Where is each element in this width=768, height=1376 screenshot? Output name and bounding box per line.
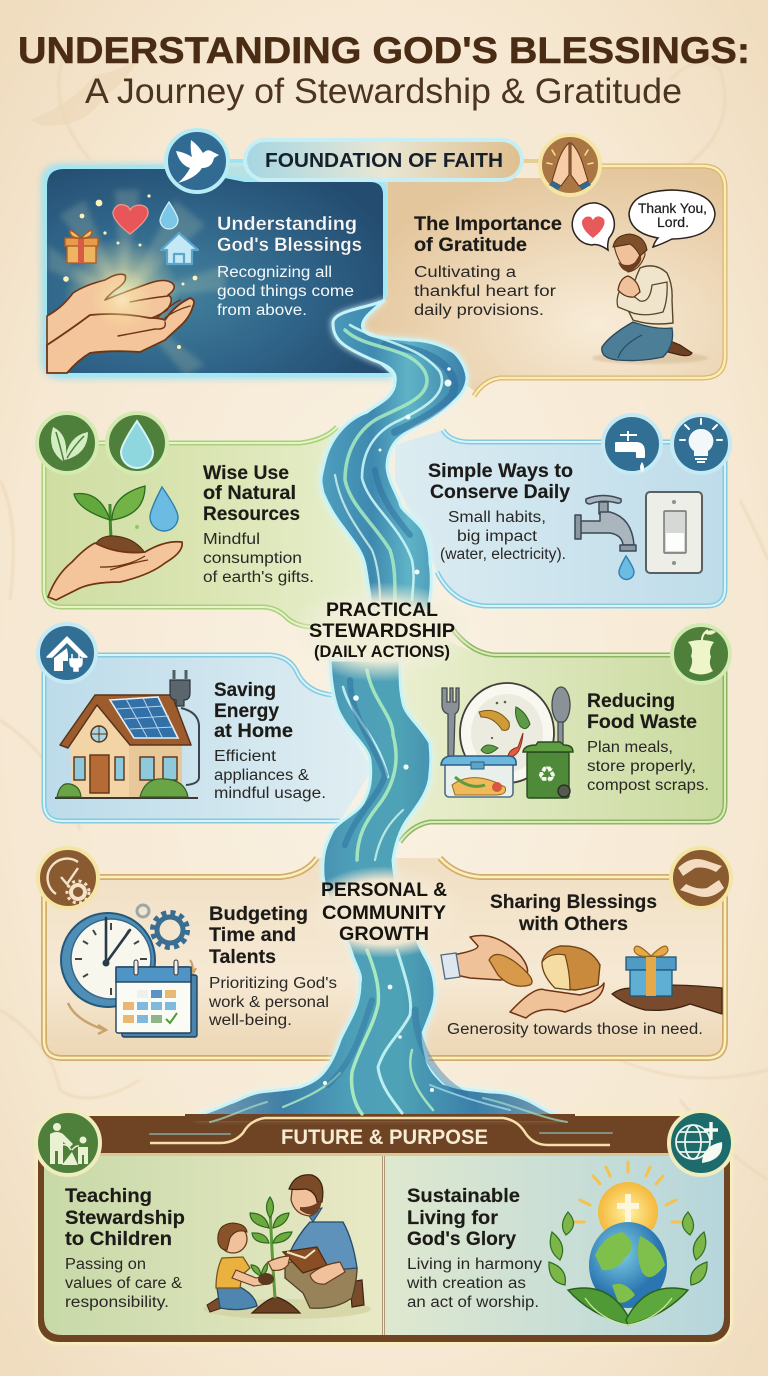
text: reducing food waste xyxy=(587,690,709,794)
text: sustainable living for god's glory: Living in harmony xyxy=(407,1256,542,1273)
river xyxy=(150,300,612,1134)
text: sustainable living for god's glory: with creation as xyxy=(406,1275,526,1292)
hands xyxy=(47,274,174,350)
illustration: clock and calendar xyxy=(61,905,197,1037)
icon: family planting xyxy=(36,1111,100,1175)
banner: foundation of faith: FOUNDATION OF FAITH xyxy=(265,150,503,172)
text: sustainable living for god's glory: an act of worship. xyxy=(407,1294,539,1311)
section label: personal and community growth: GROWTH xyxy=(339,923,429,945)
text: sharing blessings with others: Sharing Blessings xyxy=(490,891,657,913)
text: sustainable living for god's glory: Sustainable xyxy=(407,1185,520,1207)
text: wise use of natural resources xyxy=(203,462,314,586)
title: UNDERSTANDING GOD'S BLESSINGS: xyxy=(18,30,750,71)
icon: seedling leaves xyxy=(37,413,97,473)
text: importance of gratitude xyxy=(414,213,562,319)
text: simple ways to conserve daily: big impact xyxy=(457,528,538,545)
text: reducing food waste: Plan meals, xyxy=(587,739,673,756)
illustration: father and child planting xyxy=(203,1175,371,1319)
panel: understanding god's blessings xyxy=(40,163,395,380)
icon: praying hands xyxy=(540,135,600,195)
section label: practical stewardship: STEWARDSHIP xyxy=(309,620,455,642)
panel: reducing food waste xyxy=(395,628,725,842)
child xyxy=(207,1298,222,1312)
text: sustainable living for god's glory xyxy=(406,1185,542,1311)
thank you speech bubble: Lord. xyxy=(657,214,689,230)
thank you speech bubble xyxy=(629,190,715,247)
text: understanding god's blessings: good things come xyxy=(217,283,354,300)
illustration: hands sharing bread and gift xyxy=(441,935,722,1018)
icon: light bulb xyxy=(672,415,730,473)
text: wise use of natural resources: Resources xyxy=(203,503,300,525)
text: teaching stewardship to children: Teaching xyxy=(65,1185,152,1207)
panel: future and purpose xyxy=(35,1113,733,1345)
text: simple ways to conserve daily: Simple Ways to xyxy=(428,460,573,482)
text: importance of gratitude: Cultivating a xyxy=(414,264,516,281)
text: sustainable living for god's glory: Living for xyxy=(407,1207,498,1229)
text: saving energy at home xyxy=(214,679,326,802)
text: wise use of natural resources: of earth's gifts. xyxy=(203,569,314,586)
illustration: plate, cutlery, container and compost bin: ♻ xyxy=(537,762,557,787)
icon: house xyxy=(161,233,198,264)
text: teaching stewardship to children: Passing on xyxy=(65,1256,146,1273)
text: simple ways to conserve daily: (water, electricity). xyxy=(440,546,566,563)
text: importance of gratitude: The Importance xyxy=(414,213,562,235)
panel: simple ways to conserve daily xyxy=(395,430,725,606)
section label: personal and community growth xyxy=(321,879,447,945)
text: budgeting time and talents: work & personal xyxy=(208,994,329,1011)
banner: foundation of faith xyxy=(226,140,540,180)
text: reducing food waste: Reducing xyxy=(587,690,675,712)
text: generosity caption: Generosity towards those in need. xyxy=(447,1021,703,1038)
text: reducing food waste: compost scraps. xyxy=(587,777,709,794)
text: understanding god's blessings: Recognizing all xyxy=(217,264,332,281)
text: wise use of natural resources: Wise Use xyxy=(203,462,289,484)
text: simple ways to conserve daily xyxy=(428,460,573,563)
icon: apple core xyxy=(672,625,730,683)
text: budgeting time and talents: Budgeting xyxy=(209,903,308,925)
mound and sapling xyxy=(252,1297,300,1313)
text: wise use of natural resources: Mindful xyxy=(203,531,260,548)
watermark: dove xyxy=(30,55,140,126)
section label: personal and community growth: COMMUNITY xyxy=(322,902,446,924)
text: understanding god's blessings: from above. xyxy=(217,302,307,319)
text: sharing blessings with others: with Others xyxy=(518,913,628,935)
text: wise use of natural resources: consumption xyxy=(203,550,302,567)
icon: caring hands xyxy=(671,848,731,908)
text: understanding god's blessings: Understanding xyxy=(217,213,357,235)
panel: wise use of natural resources xyxy=(44,427,375,632)
banner: future and purpose: FUTURE & PURPOSE xyxy=(281,1126,488,1149)
icon: clock and gear xyxy=(38,848,98,908)
section label: practical stewardship: (DAILY ACTIONS) xyxy=(314,643,450,661)
section label: personal and community growth: PERSONAL & xyxy=(321,879,447,901)
text: saving energy at home: Efficient xyxy=(214,748,277,765)
text: budgeting time and talents: Time and xyxy=(209,924,296,946)
illustration: seedling in cupped hand with water drop xyxy=(48,486,182,600)
text: sustainable living for god's glory: God's Glory xyxy=(407,1228,516,1250)
text: teaching stewardship to children: responsibility. xyxy=(65,1294,169,1311)
text: simple ways to conserve daily: Conserve Daily xyxy=(430,481,570,503)
text: budgeting time and talents: Talents xyxy=(209,946,276,968)
text: simple ways to conserve daily: Small habits, xyxy=(448,509,546,526)
text: saving energy at home: at Home xyxy=(214,720,293,742)
illustration: earth with cross, sun and leaves xyxy=(549,1162,707,1325)
text: saving energy at home: appliances & xyxy=(214,767,310,784)
illustration: plate, cutlery, container and compost bin xyxy=(441,683,573,798)
icon: globe cross leaf xyxy=(669,1111,733,1175)
father xyxy=(350,1280,364,1307)
banner: future and purpose xyxy=(150,1118,610,1149)
text: saving energy at home: mindful usage. xyxy=(214,785,326,802)
panel: saving energy at home xyxy=(44,655,372,821)
panel: personal and community growth xyxy=(44,858,725,1058)
text: understanding god's blessings xyxy=(217,213,362,319)
icon: gift xyxy=(65,230,98,263)
text: saving energy at home: Energy xyxy=(214,700,279,722)
illustration: praying man with speech bubbles xyxy=(572,190,715,364)
text: importance of gratitude: thankful heart for xyxy=(414,283,556,300)
text: teaching stewardship to children: values of care & xyxy=(65,1275,183,1292)
icon: house plug xyxy=(38,624,96,682)
illustration: faucet, drip and light switch xyxy=(575,492,702,580)
text: importance of gratitude: daily provisions. xyxy=(414,302,544,319)
section label: practical stewardship: PRACTICAL xyxy=(326,599,438,621)
icon: heart xyxy=(113,205,148,234)
icon: tap xyxy=(603,415,661,473)
text: teaching stewardship to children xyxy=(65,1185,185,1311)
text: teaching stewardship to children: Stewardship xyxy=(65,1207,185,1229)
text: budgeting time and talents: Prioritizing God's xyxy=(209,975,337,992)
text: reducing food waste: store properly, xyxy=(587,758,696,775)
illustration: open hands with blessings xyxy=(47,190,225,375)
title xyxy=(18,30,750,111)
text: sharing blessings with others xyxy=(490,891,657,935)
icon: water drop xyxy=(160,202,178,229)
panel: importance of gratitude xyxy=(364,166,725,396)
text: understanding god's blessings: God's Blessings xyxy=(217,234,362,256)
text: saving energy at home: Saving xyxy=(214,679,276,701)
text: importance of gratitude: of Gratitude xyxy=(414,234,527,256)
illustration: solar house with plug xyxy=(55,670,199,798)
section label: practical stewardship xyxy=(309,599,455,661)
icon: natural water drop xyxy=(107,413,167,473)
heart speech bubble xyxy=(572,203,614,250)
title: A Journey of Stewardship & Gratitude xyxy=(85,72,682,111)
text: wise use of natural resources: of Natural xyxy=(203,482,296,504)
icon: dove xyxy=(166,130,228,192)
thank you speech bubble: Thank You, xyxy=(638,200,707,216)
text: reducing food waste: Food Waste xyxy=(587,711,697,733)
text: budgeting time and talents xyxy=(208,903,337,1029)
text: budgeting time and talents: well-being. xyxy=(208,1012,292,1029)
text: teaching stewardship to children: to Children xyxy=(65,1228,172,1250)
